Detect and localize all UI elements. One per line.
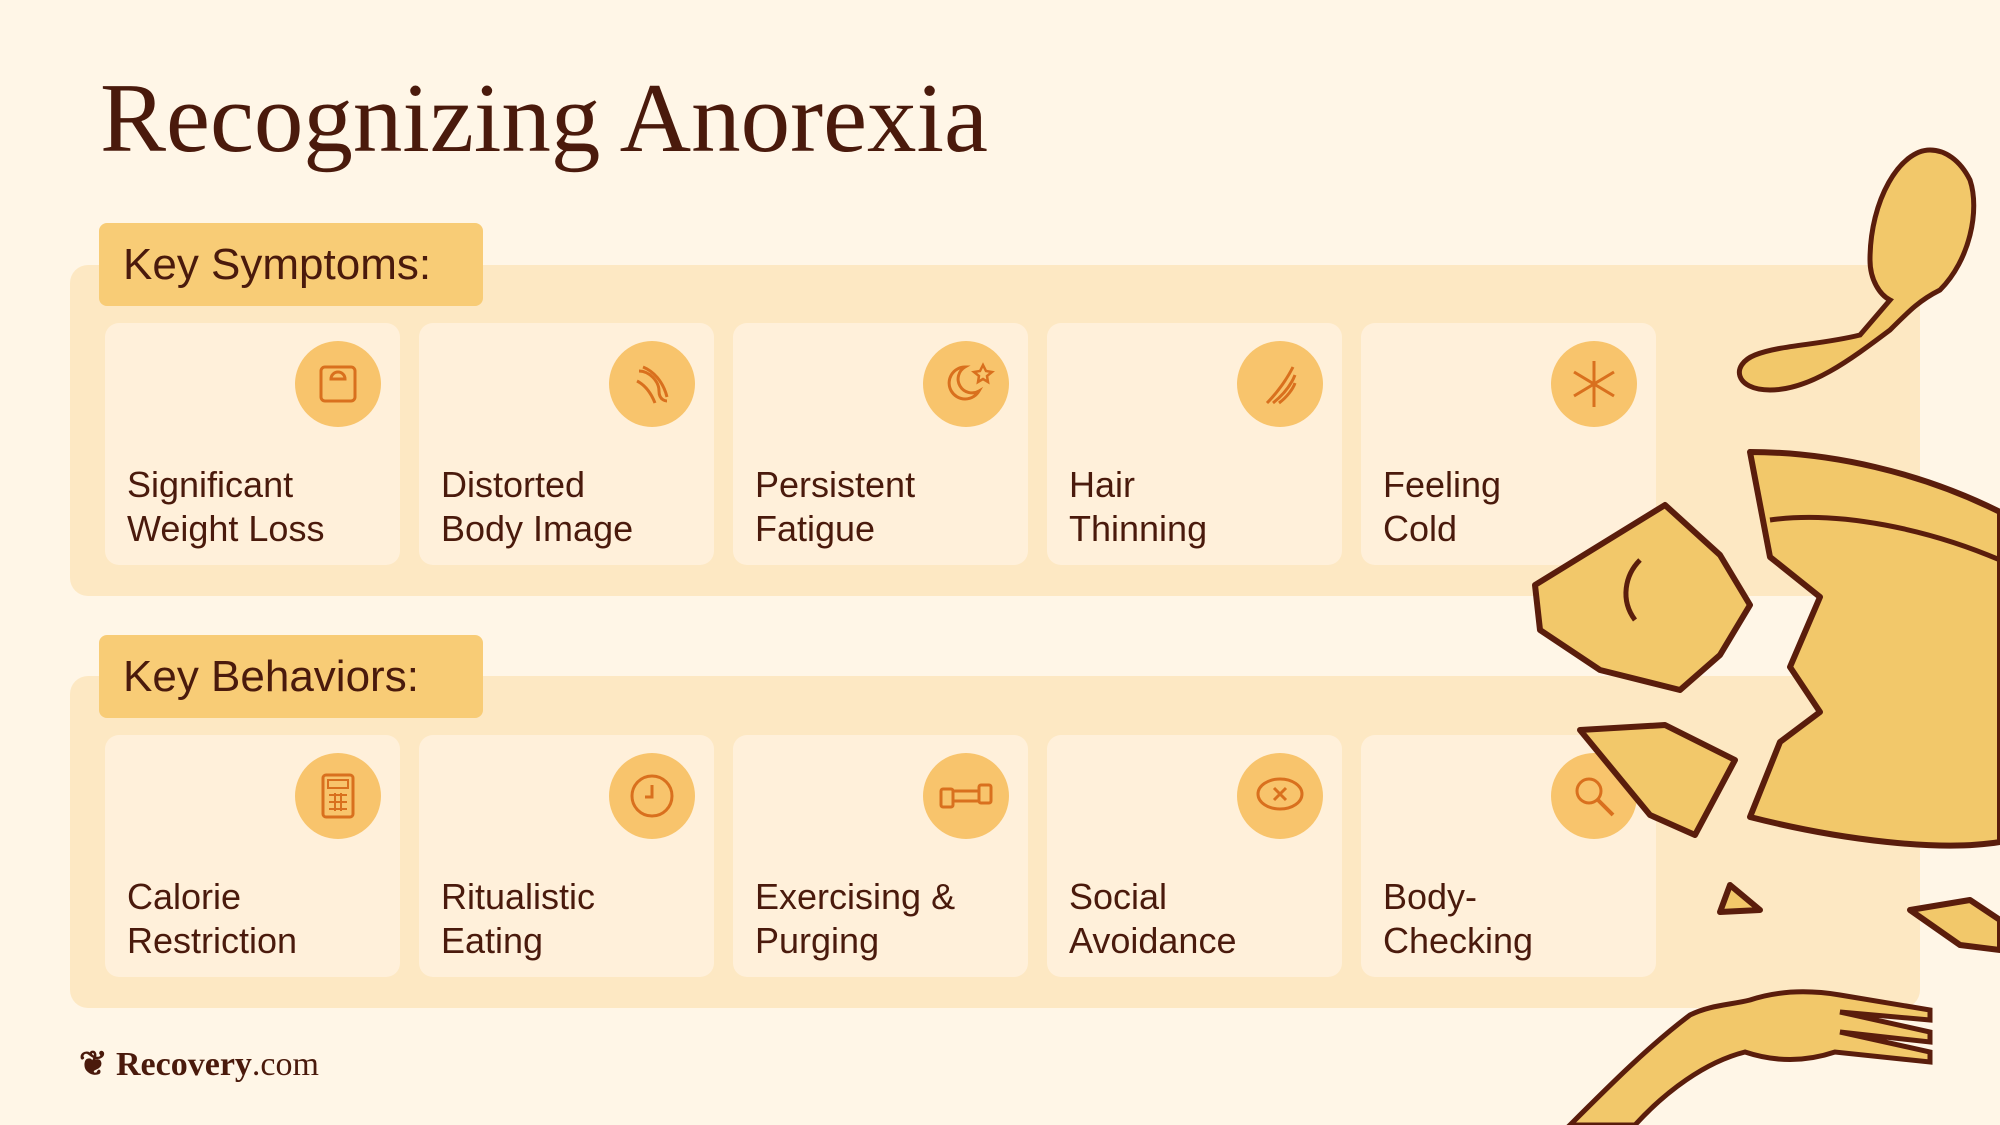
illustration: spoon, broken plate, fork xyxy=(1532,148,2000,1125)
tab: key symptoms: Key Symptoms: xyxy=(123,240,431,289)
card: ritualistic eating: Eating xyxy=(441,920,543,961)
title: Recognizing Anorexia xyxy=(100,64,988,173)
card: hair thinning: Thinning xyxy=(1069,508,1207,549)
card: hair thinning xyxy=(1047,323,1342,565)
card: body image: Distorted xyxy=(441,464,585,505)
card: ritualistic eating: Ritualistic xyxy=(441,876,595,917)
card: feeling cold: Feeling xyxy=(1383,464,1501,505)
tab: key behaviors xyxy=(99,635,483,718)
card: weight loss xyxy=(105,323,400,565)
card: exercising xyxy=(733,735,1028,977)
card: fatigue xyxy=(733,323,1028,565)
card: exercising: Exercising & xyxy=(755,876,955,917)
card: calorie restriction xyxy=(105,735,400,977)
spoon xyxy=(1739,150,1974,390)
panel: key symptoms xyxy=(70,265,1920,596)
tab: key behaviors: Key Behaviors: xyxy=(123,652,419,701)
card: weight loss: Significant xyxy=(127,464,293,505)
card: social avoidance: Social xyxy=(1069,876,1167,917)
card: body checking: Checking xyxy=(1383,920,1533,961)
card: social avoidance xyxy=(1047,735,1342,977)
card: fatigue: Fatigue xyxy=(755,508,875,549)
card: body checking: Body- xyxy=(1383,876,1477,917)
card: social avoidance: Avoidance xyxy=(1069,920,1236,961)
card: feeling cold: Cold xyxy=(1383,508,1457,549)
card: body image: Body Image xyxy=(441,508,633,549)
plate pieces xyxy=(1535,452,2000,950)
panel: key behaviors xyxy=(70,676,1920,1008)
card: body checking xyxy=(1361,735,1656,977)
card: calorie restriction: Calorie xyxy=(127,876,241,917)
card: feeling cold xyxy=(1361,323,1656,565)
card: hair thinning: Hair xyxy=(1069,464,1135,505)
card: exercising: Purging xyxy=(755,920,879,961)
card: calorie restriction: Restriction xyxy=(127,920,297,961)
card: fatigue: Persistent xyxy=(755,464,915,505)
card: body image xyxy=(419,323,714,565)
tab: key symptoms xyxy=(99,223,483,306)
card: ritualistic eating xyxy=(419,735,714,977)
card: weight loss: Weight Loss xyxy=(127,508,324,549)
fork xyxy=(1570,992,1930,1125)
logo: ❦ Recovery.com xyxy=(79,1046,319,1083)
